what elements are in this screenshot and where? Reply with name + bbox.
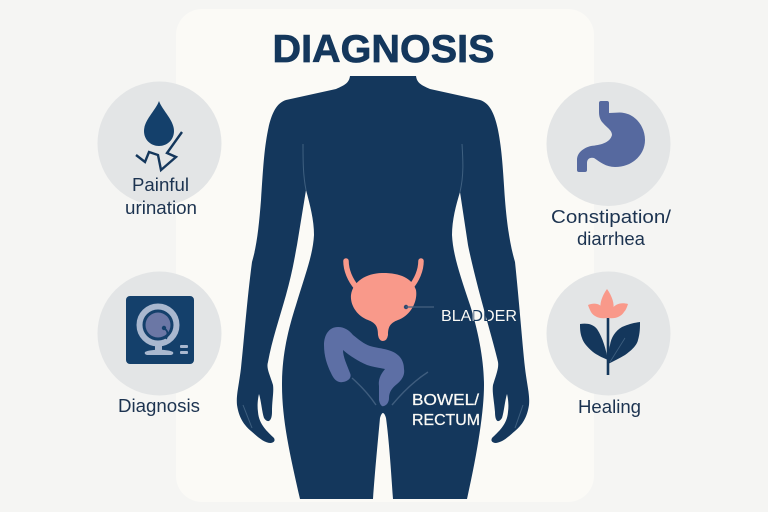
label: Constipation/	[551, 207, 671, 227]
label: bowel / rectum: BOWEL/	[412, 392, 480, 409]
bladder organ	[346, 261, 434, 341]
panel: central background	[176, 9, 594, 502]
icon circle	[98, 272, 222, 396]
panel: healing	[546, 272, 670, 417]
icon: pain zigzag	[136, 132, 182, 170]
label: bladder: BLADDER	[441, 308, 517, 325]
bowel and rectum organ	[324, 327, 428, 406]
panel: constipation / diarrhea	[546, 82, 671, 249]
label: Diagnosis	[118, 396, 200, 416]
label: Healing	[578, 397, 641, 417]
icon: water drop	[144, 101, 174, 146]
icon: flower	[580, 289, 640, 375]
panel: painful urination	[98, 82, 222, 218]
body silhouette	[237, 76, 529, 499]
label: Painful	[132, 175, 189, 195]
panel: diagnosis	[98, 272, 222, 416]
label: urination	[125, 198, 197, 218]
icon: stomach	[577, 101, 645, 172]
label: diarrhea	[577, 229, 646, 249]
title: DIAGNOSIS	[272, 28, 494, 71]
label: bowel / rectum: RECTUM	[412, 412, 480, 429]
icon: scanner	[126, 296, 194, 364]
icon circle	[546, 272, 670, 396]
icon circle	[98, 82, 222, 206]
icon circle	[546, 82, 670, 206]
